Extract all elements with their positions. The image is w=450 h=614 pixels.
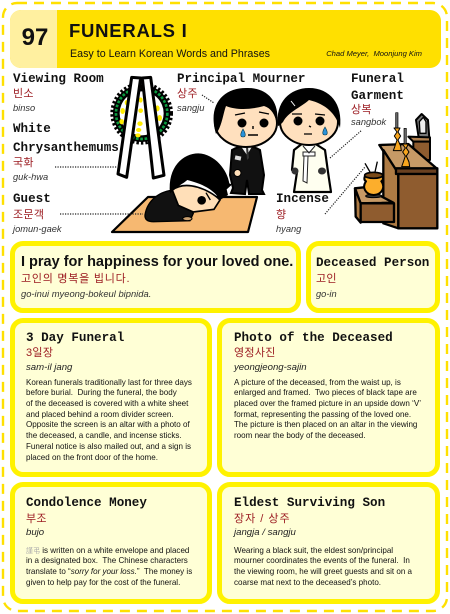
body text <box>26 546 192 587</box>
label: viewing room: Viewing Room <box>13 72 104 86</box>
phrase in Korean: 고인의 명복을 빕니다. <box>21 273 130 285</box>
heading: Eldest Surviving Son <box>234 496 385 510</box>
label: viewing room <box>13 72 104 113</box>
label: guest: 조문객 <box>13 209 44 221</box>
panel: deceased person <box>306 241 440 313</box>
body text: the viewing room, he will greet guests and sit on a <box>234 567 412 576</box>
body text <box>26 378 192 462</box>
illustration: funeral scene <box>55 76 438 234</box>
label: viewing room: binso <box>13 103 35 113</box>
label: white chrysanthemums <box>13 122 119 182</box>
Korean term: 장자 / 상주 <box>234 513 291 525</box>
label: incense: 향 <box>276 209 286 221</box>
label: guest <box>12 192 62 234</box>
label: principal mourner: 상주 <box>177 88 198 100</box>
label: incense <box>276 192 329 234</box>
label: principal mourner: sangju <box>177 103 204 113</box>
panel: photo of the deceased <box>217 318 440 477</box>
label: funeral garment: sangbok <box>351 117 386 127</box>
icon: mourning woman in white garment <box>278 88 340 192</box>
Korean term: 3일장 <box>26 347 53 359</box>
label: principal mourner: Principal Mourner <box>177 72 305 86</box>
body text <box>234 546 412 587</box>
label: white chrysanthemums: guk-hwa <box>13 172 48 182</box>
phrase romanization: go-inui myeong-bokeul bipnida. <box>21 288 151 299</box>
body text: Opposite the screen is an altar with a photo of <box>26 420 190 429</box>
title: FUNERALS I <box>69 20 188 41</box>
authors: Chad Meyer, Moonjung Kim <box>326 49 422 58</box>
romanization: jangja / sangju <box>234 527 296 538</box>
body text: Wearing a black suit, the eldest son/principal <box>234 546 393 555</box>
icon: bowing guest <box>145 153 232 222</box>
body text: The picture is then placed on an altar in the viewing <box>234 420 417 429</box>
phrase in English: I pray for happiness for your loved one. <box>21 254 293 270</box>
lesson number: 97 <box>22 24 48 51</box>
body text: 謹弔 is written on a white envelope and placed <box>26 546 189 556</box>
icon: woven mat <box>112 197 257 232</box>
body text: Korean funerals traditionally last for three days <box>26 378 192 387</box>
label: incense: Incense <box>276 192 329 206</box>
header banner <box>10 10 441 68</box>
label: white chrysanthemums: White <box>13 122 51 136</box>
body text: given to help pay for the cost of the funeral. <box>26 578 180 587</box>
Korean term: 부조 <box>26 513 47 525</box>
icon: altar with candles and incense <box>355 113 437 228</box>
body text: A picture of the deceased, from the waist up, is <box>234 378 401 387</box>
label: incense: hyang <box>276 224 301 234</box>
body text: translate to “sorry for your loss.” The money is <box>26 567 192 576</box>
romanization: bujo <box>26 527 44 538</box>
label: white chrysanthemums: 국화 <box>13 157 34 169</box>
body text: before burial. During the funeral, the body <box>26 388 177 397</box>
heading: Deceased Person <box>316 256 429 270</box>
label: principal mourner <box>177 72 305 113</box>
body text: Funeral notice is also mailed out, and a sign is <box>26 442 191 451</box>
subtitle: Easy to Learn Korean Words and Phrases <box>70 48 270 60</box>
label: viewing room: 빈소 <box>13 88 34 100</box>
Korean term: 영정사진 <box>234 347 276 359</box>
body text: room near the body of the deceased. <box>234 431 366 440</box>
body text: enlarged and framed. Two pieces of black tape are <box>234 388 417 397</box>
romanization: go-in <box>316 289 337 299</box>
Korean term: 고인 <box>316 273 337 285</box>
body text: and placed behind a room divider screen. <box>26 410 174 419</box>
body text: coarse mat next to the deceased’s photo. <box>234 578 381 587</box>
heading: Condolence Money <box>26 496 147 510</box>
romanization: sam-il jang <box>26 362 72 373</box>
dotted leader lines <box>55 95 365 214</box>
lesson number <box>10 10 57 68</box>
label: guest: Guest <box>13 192 51 206</box>
romanization: yeongjeong-sajin <box>234 362 307 373</box>
panel: key phrase <box>10 241 301 313</box>
panel: eldest surviving son <box>217 482 440 604</box>
body text: in a designated box. The Chinese characters <box>26 556 188 565</box>
body text: format, representing the passing of the loved one. <box>234 410 411 419</box>
body text <box>234 378 421 440</box>
body text: of the deceased is covered with a white sheet <box>26 399 188 408</box>
panel: condolence money <box>10 482 212 604</box>
icon: chrysanthemum wreath <box>113 77 170 178</box>
heading: 3 Day Funeral <box>26 331 124 345</box>
body text: the deceased, a candle, and incense sticks. <box>26 431 182 440</box>
body text: placed on the front door of the home. <box>26 453 158 462</box>
heading: Photo of the Deceased <box>234 331 393 345</box>
body text: placed over the framed picture in an upside down ‘V’ <box>234 399 421 408</box>
panel: 3 day funeral <box>10 318 212 477</box>
label: funeral garment: Garment <box>351 89 404 103</box>
label: funeral garment <box>351 72 404 127</box>
icon: principal mourner <box>214 88 277 194</box>
label: white chrysanthemums: Chrysanthemums <box>13 141 119 155</box>
body text: mourner coordinates the events of the funeral. In <box>234 556 410 565</box>
label: guest: jomun-gaek <box>13 224 62 234</box>
label: funeral garment: Funeral <box>351 72 404 86</box>
label: funeral garment: 상복 <box>351 104 372 116</box>
